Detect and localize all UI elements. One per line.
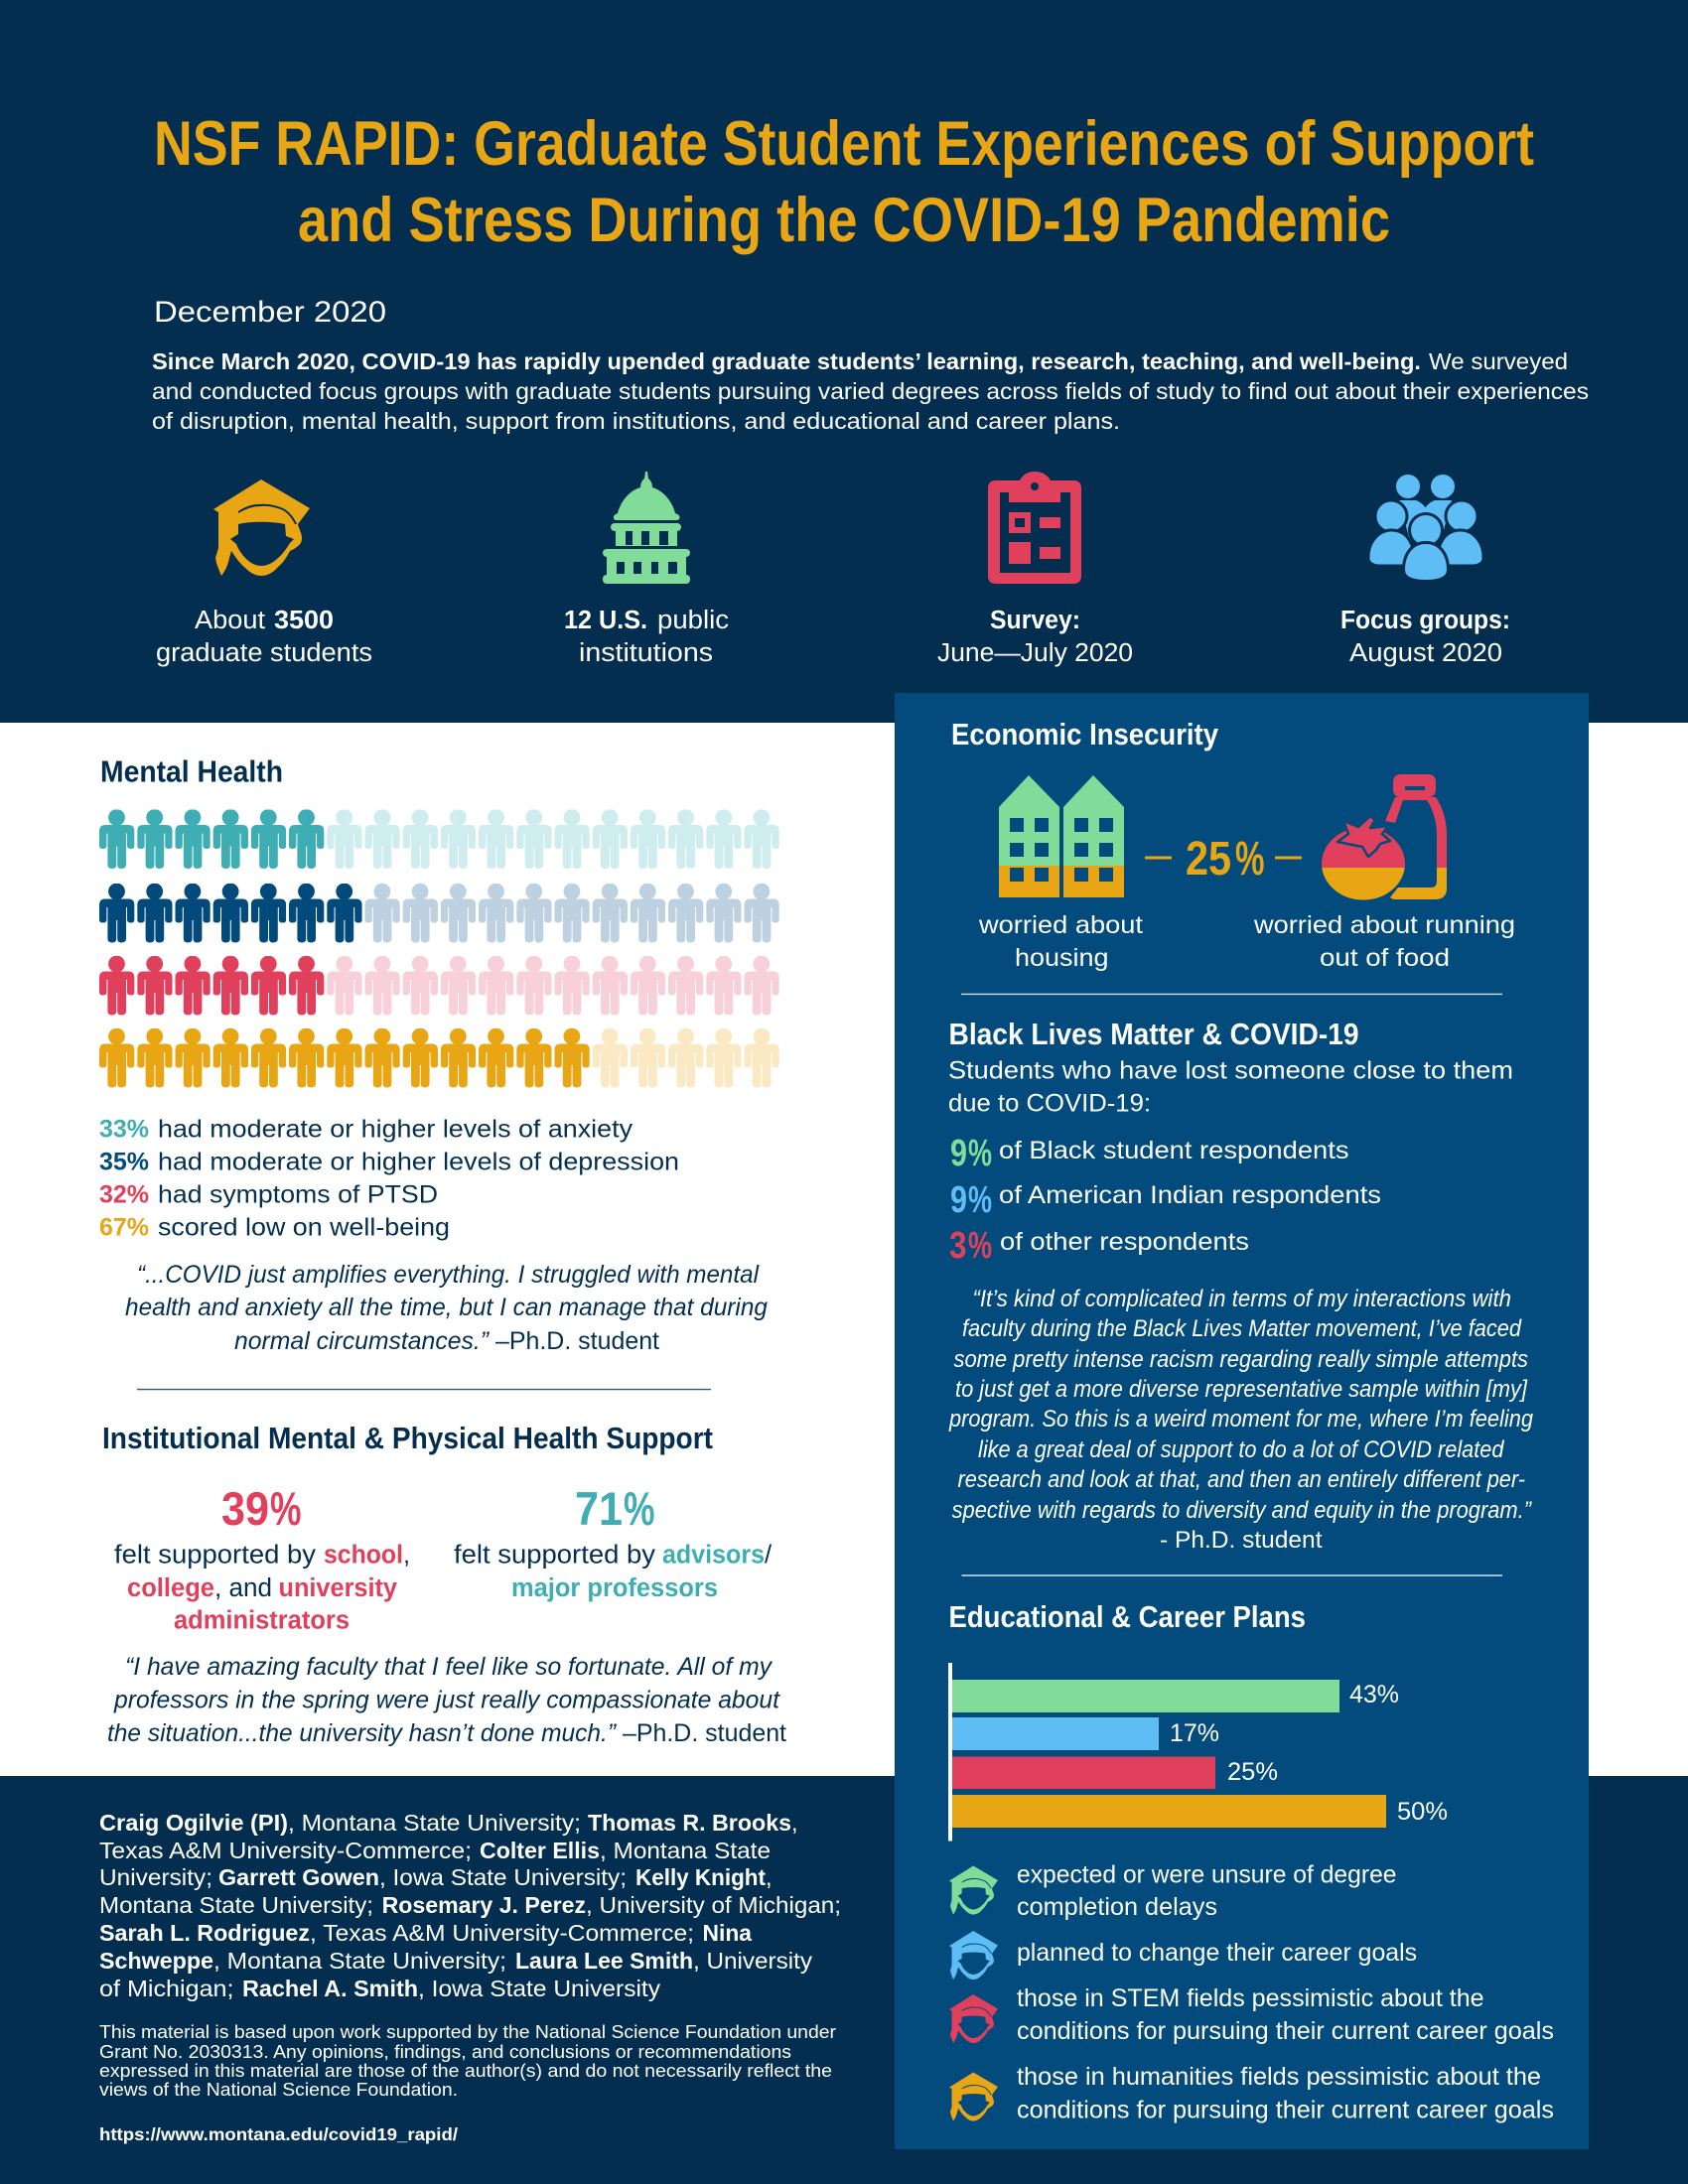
intro: students who lost someone (948, 1056, 1513, 1118)
quote: mental health: –Ph.D. student (495, 1327, 659, 1355)
footer background (0, 1776, 1688, 2184)
legend text: humanities pessimism (1017, 2063, 1554, 2124)
bar values: 25% (1227, 1758, 1278, 1786)
bar values: 50% (1397, 1798, 1448, 1826)
intro paragraph: and conducted focus groups with graduate students pursuing varied degrees across fields of study to find out about their experiences (152, 378, 1589, 404)
quote: black lives matter: - Ph.D. student (1160, 1527, 1323, 1554)
authors list: , University of Michigan; (586, 1892, 841, 1918)
authors list: , Iowa State University; (379, 1864, 627, 1890)
quote: black lives matter: like a great deal of support to do a lot of COVID related (978, 1436, 1504, 1463)
title (154, 109, 1534, 255)
funding disclaimer: This material is based upon work supported by the National Science Foundation under (99, 2021, 836, 2042)
stat: focus group dates: August 2020 (1349, 639, 1502, 667)
stat: 25 percent: % (1235, 833, 1265, 886)
quote: faculty support: “I have amazing faculty that I feel like so fortunate. All of my (125, 1653, 773, 1681)
authors list: , Iowa State University (418, 1976, 660, 2001)
bar values: 17% (1170, 1719, 1219, 1747)
stats: loss by group: % (968, 1133, 992, 1174)
stats: loss by group: of Black student respondents (999, 1137, 1348, 1164)
stat: institutions: public (657, 607, 729, 634)
intro: students who lost someone: due to COVID-19: (948, 1090, 1151, 1118)
bar chart: educational and career plans (948, 1663, 1448, 1841)
authors list: Rosemary J. Perez (382, 1892, 586, 1918)
mental health statistics list: had moderate or higher levels of anxiety (158, 1116, 633, 1144)
legend text: change goals: planned to change their career goals (1017, 1939, 1417, 1967)
authors list: , University (693, 1948, 812, 1974)
stat: 39 percent administrators: administrators (174, 1606, 350, 1634)
quote: faculty support: professors in the spring were just really compassionate about (113, 1686, 780, 1713)
label: worried about housing: worried about (978, 911, 1143, 939)
label: worried about food (1253, 911, 1515, 972)
authors list: Rachel A. Smith (242, 1976, 418, 2001)
stat: 39 percent administrators: university (278, 1574, 398, 1602)
stat: 39 percent administrators: , and (214, 1574, 272, 1602)
authors list: University; (99, 1864, 212, 1890)
stat: institutions: 12 U.S. (564, 607, 647, 634)
authors list (99, 1810, 841, 2001)
stats: loss by group: of American Indian respondents (999, 1181, 1381, 1209)
icon: graduation cap student (213, 479, 310, 576)
authors list: Laura Lee Smith (515, 1948, 693, 1974)
icon: legend red cap (949, 1994, 998, 2043)
quote: faculty support (107, 1653, 786, 1747)
funding disclaimer: expressed in this material are those of the author(s) and do not necessarily reflect the (99, 2060, 832, 2081)
stat: institutions (564, 607, 729, 667)
quote: black lives matter: research and look at that, and then an entirely different per- (957, 1466, 1525, 1493)
funding disclaimer (99, 2021, 836, 2100)
intro paragraph: Since March 2020, COVID-19 has rapidly upended graduate students’ learning, research, teaching, and well-being. (152, 348, 1421, 374)
stat: survey dates: June—July 2020 (937, 639, 1133, 667)
label: worried about housing (978, 911, 1143, 972)
intro paragraph: of disruption, mental health, support from institutions, and educational and career plans. (152, 408, 1120, 434)
right panel background (895, 693, 1589, 2149)
mental health statistics list: scored low on well-being (158, 1213, 450, 1241)
authors list: Garrett Gowen (218, 1864, 379, 1890)
stat: 39 percent administrators: felt supported by (114, 1541, 316, 1569)
authors list: Kelly Knight (635, 1864, 766, 1890)
pictogram: PTSD 6 of 18 (99, 956, 779, 1015)
stat: 39 percent administrators: college (127, 1574, 214, 1602)
stat: 25 percent: 25 (1186, 833, 1231, 886)
title: and Stress During the COVID-19 Pandemic (298, 186, 1390, 255)
stat: 71 percent advisors (454, 1482, 773, 1602)
quote: black lives matter: to just get a more diverse representative sample within [my] (955, 1376, 1528, 1403)
project url: https://www.montana.edu/covid19_rapid/ (99, 2124, 458, 2144)
bar values (1170, 1681, 1448, 1826)
stats: loss by group: of other respondents (1000, 1228, 1249, 1256)
icon: survey clipboard (988, 472, 1081, 584)
stats: loss by group: 9 (950, 1179, 967, 1221)
authors list: , (766, 1864, 773, 1890)
quote: faculty support: –Ph.D. student (623, 1719, 786, 1747)
stat: 39 percent administrators: 39 (221, 1482, 269, 1535)
bar: 43 percent (952, 1680, 1339, 1712)
funding disclaimer: views of the National Science Foundation. (99, 2079, 458, 2100)
mental health statistics list: 33% (99, 1116, 149, 1144)
quote: mental health: “...COVID just amplifies everything. I struggled with mental (137, 1261, 760, 1289)
heading: educational and career plans: Educational & Career Plans (949, 1599, 1306, 1634)
bar: 50 percent (952, 1795, 1386, 1828)
authors list: Texas A&M University-Commerce; (99, 1838, 472, 1863)
icon: capitol building (603, 472, 690, 584)
authors list: , Montana State University; (288, 1810, 581, 1836)
stat: focus group dates: Focus groups: (1340, 607, 1510, 634)
intro: students who lost someone: Students who have lost someone close to them (948, 1056, 1513, 1084)
authors list: Montana State University; (99, 1892, 373, 1918)
stat: graduate students: graduate students (156, 639, 372, 667)
heading: economic insecurity: Economic Insecurity (951, 717, 1219, 751)
quote: mental health: health and anxiety all the time, but I can manage that during (125, 1294, 768, 1321)
quote: faculty support: the situation...the university hasn’t done much.” (107, 1719, 618, 1747)
stats: loss by group: 9 (950, 1133, 967, 1174)
quote: black lives matter: spective with regards to diversity and equity in the program.” (952, 1497, 1532, 1524)
legend text: degree delays (1017, 1860, 1396, 1921)
mental health statistics list: 35% (99, 1148, 149, 1175)
icon: focus group people (1368, 475, 1483, 582)
stat: 39 percent administrators: school (324, 1541, 403, 1569)
icon: apartment buildings (999, 775, 1124, 897)
authors list: Thomas R. Brooks (588, 1810, 791, 1836)
legend text: STEM pessimism: conditions for pursuing their current career goals (1017, 2017, 1554, 2045)
stat: 71 percent advisors: felt supported by (454, 1541, 655, 1569)
intro paragraph: We surveyed (1429, 348, 1568, 374)
date: December 2020 (154, 296, 386, 329)
legend text: STEM pessimism: those in STEM fields pessimistic about the (1017, 1984, 1484, 2012)
stat: 71 percent advisors: advisors (662, 1541, 765, 1569)
stat: focus group dates (1340, 607, 1510, 667)
quote: black lives matter: faculty during the Black Lives Matter movement, I’ve faced (962, 1315, 1522, 1342)
authors list: Craig Ogilvie (PI) (99, 1810, 288, 1836)
stat: survey dates: Survey: (990, 607, 1080, 634)
icon: legend green cap (949, 1866, 998, 1914)
authors list: Colter Ellis (480, 1838, 600, 1863)
mental health statistics list (99, 1116, 679, 1241)
label: worried about housing: housing (1015, 944, 1108, 972)
quote: black lives matter (948, 1286, 1534, 1554)
stat: survey dates (937, 607, 1133, 667)
funding disclaimer: Grant No. 2030313. Any opinions, findings, and conclusions or recommendations (99, 2041, 791, 2062)
authors list: Sarah L. Rodriguez (99, 1920, 310, 1946)
authors list: , Texas A&M University-Commerce; (310, 1920, 694, 1946)
mental health statistics list: had moderate or higher levels of depression (158, 1148, 679, 1175)
header background (0, 0, 1688, 723)
label: worried about food: out of food (1320, 944, 1450, 972)
authors list: , (791, 1810, 798, 1836)
mental health statistics list: had symptoms of PTSD (158, 1181, 438, 1209)
stats: loss by group (949, 1133, 1381, 1267)
quote: black lives matter: “It’s kind of complicated in terms of my interactions with (973, 1286, 1511, 1312)
stat: 39 percent administrators (114, 1482, 410, 1634)
authors list: of Michigan; (99, 1976, 234, 2001)
quote: mental health (125, 1261, 768, 1355)
stat: graduate students: 3500 (274, 607, 334, 634)
stat: 71 percent advisors: / (765, 1541, 773, 1569)
legend text: degree delays: expected or were unsure of degree (1017, 1860, 1396, 1888)
stat: 71 percent advisors: 71 (575, 1482, 623, 1535)
legend text: STEM pessimism (1017, 1984, 1554, 2045)
icon: legend gold cap (949, 2073, 998, 2120)
quote: black lives matter: program. So this is a weird moment for me, where I’m feeling (948, 1406, 1534, 1433)
legend text: humanities pessimism: conditions for pursuing their current career goals (1017, 2097, 1554, 2124)
stat: graduate students: About (195, 607, 265, 634)
pictogram: depression 7 of 18 (99, 884, 779, 943)
authors list: Schweppe (99, 1948, 213, 1974)
stat: institutions: institutions (579, 639, 713, 667)
icon: legend blue cap (949, 1931, 998, 1979)
stats: loss by group: 3 (949, 1225, 967, 1267)
icon: tomato and bottle (1321, 774, 1447, 901)
stat: 39 percent administrators: % (270, 1482, 302, 1535)
label: worried about food: worried about running (1253, 911, 1515, 939)
stats: loss by group: % (968, 1179, 992, 1221)
intro paragraph (152, 348, 1589, 434)
heading: mental health: Mental Health (100, 754, 283, 788)
authors list: Nina (703, 1920, 753, 1946)
authors list: , Montana State (600, 1838, 771, 1863)
pictogram: anxiety 6 of 18 (99, 809, 779, 869)
stat: 25 percent (1145, 833, 1302, 886)
bar values: 43% (1349, 1681, 1399, 1708)
legend text: humanities pessimism: those in humanities fields pessimistic about the (1017, 2063, 1541, 2091)
pictogram: well-being 13 of 18 (99, 1028, 779, 1088)
quote: mental health: normal circumstances.” (234, 1327, 491, 1355)
heading: institutional support: Institutional Mental & Physical Health Support (102, 1421, 713, 1455)
legend text: degree delays: completion delays (1017, 1893, 1217, 1921)
quote: black lives matter: some pretty intense racism regarding really simple attempts (953, 1346, 1528, 1373)
stat: 39 percent administrators: , (403, 1541, 410, 1569)
stat: 71 percent advisors: % (624, 1482, 655, 1535)
stat: 71 percent advisors: major professors (511, 1574, 718, 1602)
stats: loss by group: % (968, 1225, 992, 1267)
authors list: , Montana State University; (213, 1948, 506, 1974)
mental health statistics list: 67% (99, 1213, 149, 1241)
bar: 25 percent (952, 1757, 1215, 1789)
stat: graduate students (156, 607, 372, 667)
bar: 17 percent (952, 1717, 1159, 1750)
mental health statistics list: 32% (99, 1181, 149, 1209)
heading: black lives matter: Black Lives Matter & COVID-19 (949, 1017, 1358, 1051)
